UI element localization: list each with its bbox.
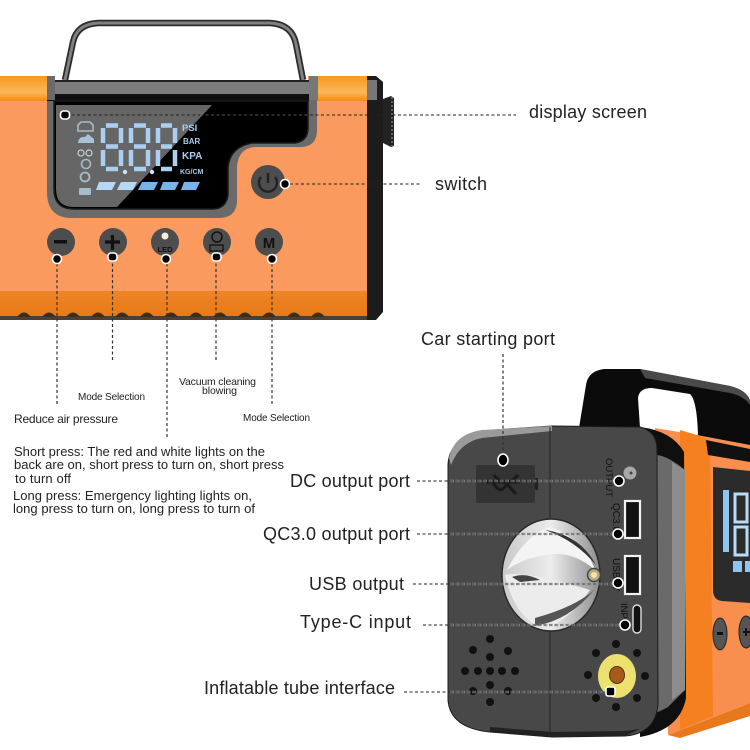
callout markers bbox=[52, 111, 630, 696]
black corner band bbox=[640, 427, 686, 737]
unit labels: KG/CM bbox=[180, 169, 204, 176]
text: short press instructions: to turn off bbox=[15, 471, 71, 486]
M button: M bbox=[263, 235, 275, 252]
right black edge bbox=[367, 76, 383, 320]
label: vacuum cleaning blowing bbox=[179, 376, 256, 397]
side dial bbox=[383, 96, 394, 147]
label: reduce air pressure: Reduce air pressure bbox=[14, 412, 118, 426]
mode icons bbox=[78, 122, 94, 195]
label: Type-C input: Type-C input bbox=[300, 612, 411, 632]
orange body bbox=[0, 76, 372, 320]
output port bbox=[603, 458, 636, 497]
text: long press instructions bbox=[13, 488, 255, 516]
rear view of the device bbox=[448, 369, 750, 738]
side plus button bbox=[739, 616, 750, 648]
flashlight lens bbox=[502, 519, 600, 631]
unit labels bbox=[180, 123, 204, 176]
display bezel bbox=[47, 84, 317, 218]
Type-C port bbox=[618, 603, 641, 633]
label: vacuum cleaning blowing: Vacuum cleaning bbox=[179, 376, 256, 388]
label: mode selection, plus button: Mode Selection bbox=[78, 392, 145, 403]
LED button: LED bbox=[158, 245, 173, 254]
label: mode selection, M button: Mode Selection bbox=[243, 413, 310, 424]
label: DC output port: DC output port bbox=[290, 471, 410, 491]
rear handle bbox=[579, 369, 750, 452]
text: short press instructions: Short press: The red and white lights on the bbox=[14, 444, 265, 459]
unit labels: KPA bbox=[182, 151, 202, 162]
label: display screen: display screen bbox=[529, 102, 647, 122]
text: short press instructions bbox=[14, 444, 284, 486]
plus button bbox=[99, 228, 127, 256]
front view of the device bbox=[0, 23, 394, 320]
inflatable tube nozzle bbox=[584, 640, 649, 711]
minus button bbox=[47, 228, 75, 256]
label: inflatable tube interface: Inflatable tube interface bbox=[204, 678, 395, 698]
dark rear panel bbox=[448, 426, 658, 737]
output port: OUTPUT bbox=[603, 458, 614, 497]
label: switch: switch bbox=[435, 174, 487, 194]
display screen bbox=[54, 101, 308, 209]
QC3 USB port bbox=[610, 501, 640, 538]
LED button bbox=[151, 228, 179, 256]
side screen bbox=[713, 467, 750, 603]
fan mode button bbox=[203, 228, 231, 256]
unit labels: BAR bbox=[183, 137, 201, 146]
digits 0.00 bbox=[103, 126, 175, 169]
car starting port cover bbox=[476, 465, 538, 503]
orange side bbox=[655, 428, 750, 735]
speaker holes bbox=[461, 635, 519, 706]
text: long press instructions: long press to turn on, long press to turn of bbox=[13, 501, 255, 516]
level bars bbox=[96, 182, 200, 190]
Type-C port: INPUT bbox=[618, 603, 629, 632]
label: vacuum cleaning blowing: blowing bbox=[202, 385, 237, 397]
side minus button bbox=[713, 618, 727, 650]
grills along the bottom bbox=[17, 312, 325, 317]
text: long press instructions: Long press: Emergency lighting lights on, bbox=[13, 488, 252, 503]
USB output port bbox=[610, 556, 640, 594]
leader lines bbox=[57, 115, 620, 692]
USB output port: USB5V bbox=[610, 558, 621, 591]
handle bbox=[65, 23, 303, 80]
label: USB output: USB output bbox=[309, 574, 404, 594]
M button bbox=[255, 228, 283, 256]
QC3 USB port: QC3.0 bbox=[610, 503, 621, 532]
label: QC3.0 output port: QC3.0 output port bbox=[263, 524, 410, 544]
label: car starting port: Car starting port bbox=[421, 329, 555, 349]
unit labels: PSI bbox=[182, 123, 197, 134]
text: short press instructions: back are on, short press to turn on, short press bbox=[14, 457, 284, 472]
handle opening bbox=[638, 388, 698, 436]
power button bbox=[251, 165, 285, 199]
